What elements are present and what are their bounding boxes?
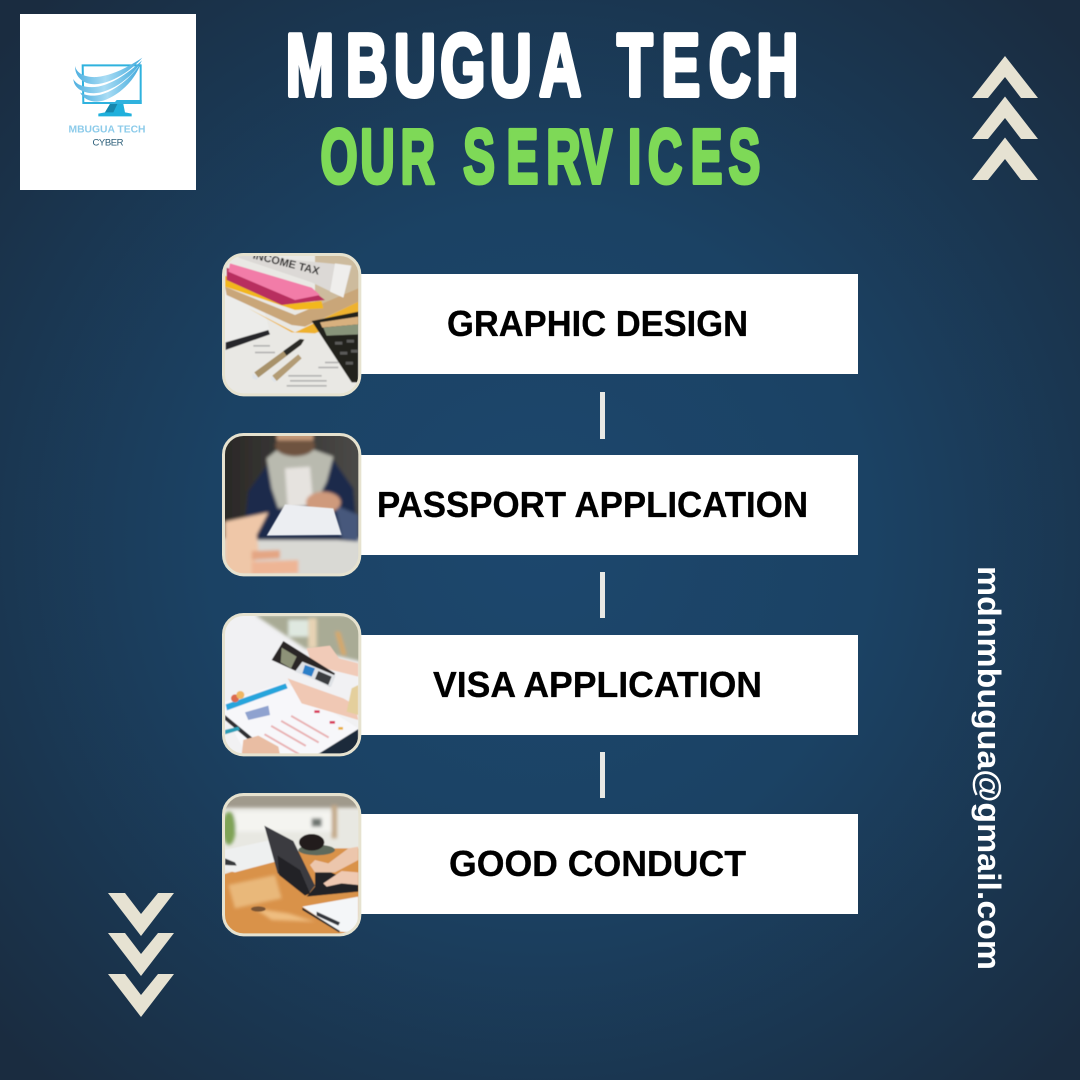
connector 2 <box>600 572 605 618</box>
label text: VISA APPLICATION <box>433 664 762 705</box>
label text: GRAPHIC DESIGN <box>447 303 748 344</box>
photo: calculator and charts <box>222 612 362 758</box>
photo frame <box>223 794 360 935</box>
label text: PASSPORT APPLICATION <box>377 484 808 525</box>
service row: passport application <box>222 432 858 578</box>
photo: laptop on wooden table <box>222 792 362 938</box>
logo text: CYBER <box>92 138 124 148</box>
connector 1 <box>600 392 605 439</box>
label bar <box>355 814 858 914</box>
service row: graphic design <box>222 250 858 398</box>
email address: mdnmbugua@gmail.com <box>971 566 1007 970</box>
subtitle: OUR SERVICES <box>321 113 760 200</box>
connector 3 <box>600 752 605 798</box>
service row: visa application <box>222 612 858 758</box>
photo: income tax folders: INCOME TAX <box>252 250 321 278</box>
photo: handing over document <box>222 432 362 578</box>
label bar <box>355 455 858 555</box>
logo text <box>68 124 146 148</box>
logo text: MBUGUA TECH <box>68 124 146 136</box>
label bar <box>355 274 858 374</box>
icon: monitor with swoosh <box>73 58 142 116</box>
photo: income tax folders <box>222 250 362 398</box>
photo frame <box>223 434 360 575</box>
photo frame <box>223 614 360 755</box>
photo frame <box>223 254 360 395</box>
title: MBUGUA TECH <box>286 16 798 114</box>
service row: good conduct <box>222 792 858 938</box>
label text: GOOD CONDUCT <box>449 843 746 884</box>
icon: down chevrons <box>108 893 174 1017</box>
logo card <box>20 14 196 190</box>
label bar <box>355 635 858 735</box>
icon: up chevrons <box>972 56 1038 180</box>
